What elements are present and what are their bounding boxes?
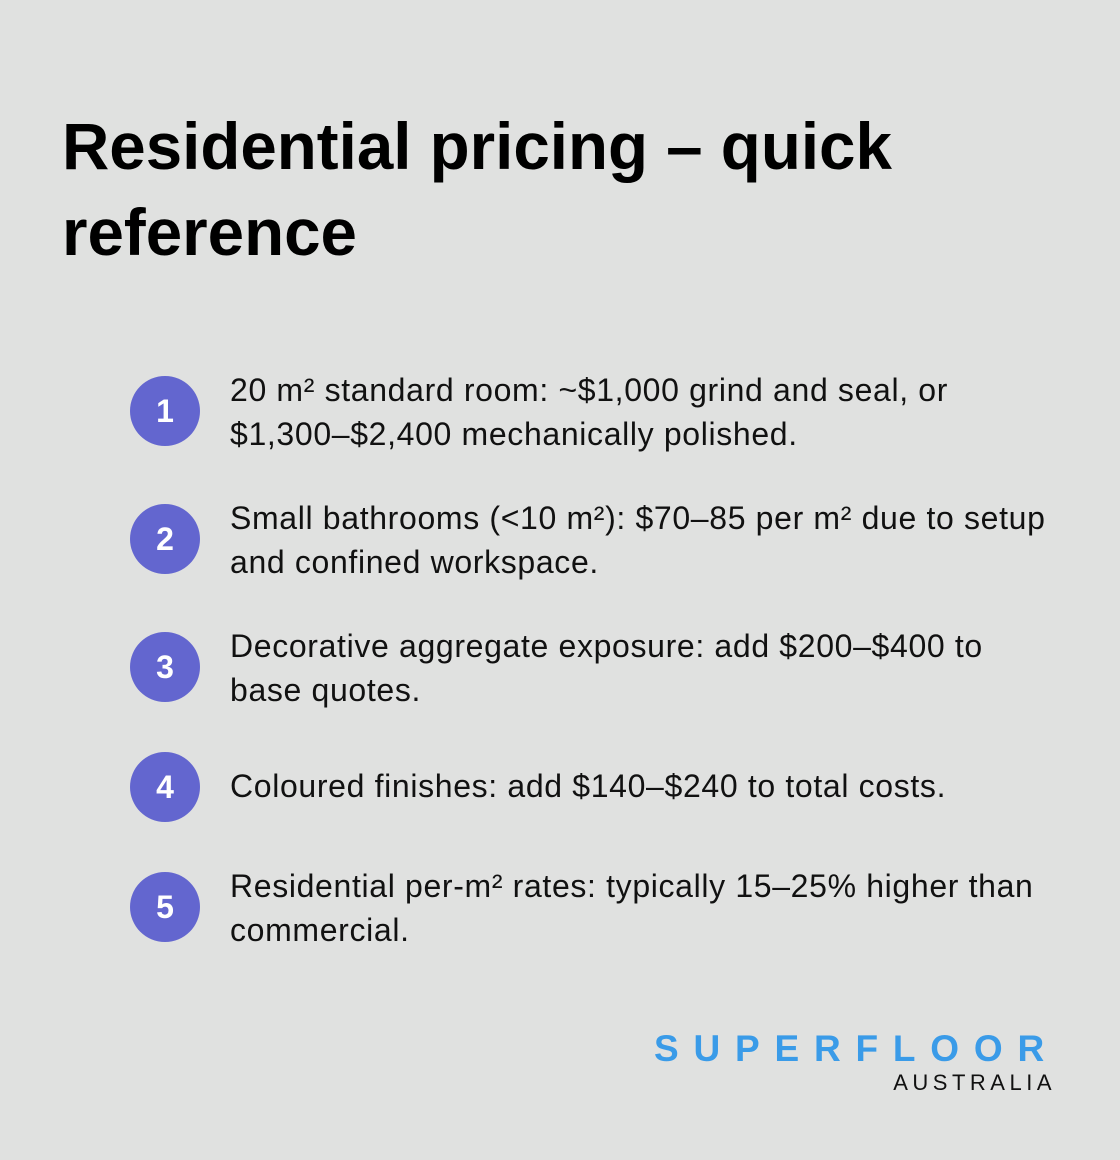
text 2: Small bathrooms (<10 m²): $70–85 per m² due to setup bbox=[230, 500, 1046, 536]
text 3 bbox=[230, 628, 983, 708]
circle 1 bbox=[130, 376, 200, 446]
text 5: Residential per-m² rates: typically 15–25% higher than bbox=[230, 868, 1034, 904]
title: reference bbox=[62, 196, 357, 269]
text 3: base quotes. bbox=[230, 672, 421, 708]
item 3 bbox=[130, 628, 983, 708]
circle 4: 4 bbox=[156, 769, 174, 805]
item 5 bbox=[130, 868, 1034, 948]
circle 5 bbox=[130, 872, 200, 942]
title: Residential pricing – quick bbox=[62, 110, 892, 183]
circle 2: 2 bbox=[156, 521, 174, 557]
circle 1: 1 bbox=[156, 393, 174, 429]
item 1 bbox=[130, 372, 948, 452]
text 1 bbox=[230, 372, 948, 452]
text 4: Coloured finishes: add $140–$240 to total costs. bbox=[230, 768, 946, 804]
logo: AUSTRALIA bbox=[893, 1070, 1056, 1095]
title bbox=[62, 110, 892, 269]
item 2 bbox=[130, 500, 1046, 580]
circle 4 bbox=[130, 752, 200, 822]
circle 5: 5 bbox=[156, 889, 174, 925]
item 4 bbox=[130, 752, 946, 822]
text 5 bbox=[230, 868, 1034, 948]
circle 3: 3 bbox=[156, 649, 174, 685]
text 2: and confined workspace. bbox=[230, 544, 599, 580]
text 5: commercial. bbox=[230, 912, 410, 948]
logo: SUPERFLOOR bbox=[654, 1028, 1059, 1069]
circle 3 bbox=[130, 632, 200, 702]
logo bbox=[654, 1028, 1059, 1095]
text 3: Decorative aggregate exposure: add $200–$400 to bbox=[230, 628, 983, 664]
circle 2 bbox=[130, 504, 200, 574]
text 1: $1,300–$2,400 mechanically polished. bbox=[230, 416, 798, 452]
text 1: 20 m² standard room: ~$1,000 grind and seal, or bbox=[230, 372, 948, 408]
text 2 bbox=[230, 500, 1046, 580]
